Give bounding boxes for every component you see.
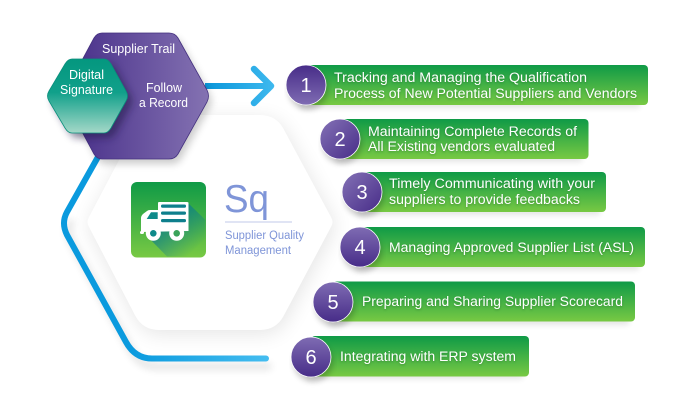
label: Digital Signature: Signature <box>60 83 113 97</box>
label: Follow a Record: Follow <box>146 81 183 95</box>
step 2 <box>320 119 588 164</box>
step 6 <box>291 336 529 382</box>
step 3: 3 <box>356 182 368 204</box>
connector: blue line around hexagon <box>64 148 271 366</box>
step 4: 4 <box>354 237 366 259</box>
step 2: All Existing vendors evaluated <box>368 139 555 154</box>
step 5 <box>313 282 635 327</box>
step 3: Timely Communicating with your <box>389 176 596 191</box>
icon: green truck tile <box>131 182 206 258</box>
step 1: Tracking and Managing the Qualification <box>334 70 587 85</box>
label: Supplier Quality Management: Supplier Quality <box>225 230 304 242</box>
step 5: 5 <box>327 292 339 314</box>
label: Digital Signature: Digital <box>69 68 104 82</box>
label: Supplier Trail: Supplier Trail <box>102 42 175 56</box>
logo: Sq Supplier Quality Management <box>224 178 304 257</box>
step 1 <box>286 65 648 110</box>
step 5: Preparing and Sharing Supplier Scorecard <box>362 294 623 309</box>
panel: teal hexagon Digital Signature <box>48 59 132 138</box>
step 6: Integrating with ERP system <box>340 349 516 364</box>
step 4: Managing Approved Supplier List (ASL) <box>389 240 634 255</box>
step 4 <box>340 227 645 272</box>
step 2: Maintaining Complete Records of <box>368 124 577 139</box>
step 1: 1 <box>300 75 312 97</box>
panel: central white hexagon <box>88 115 334 334</box>
step 2: 2 <box>334 129 346 151</box>
step 3: suppliers to provide feedbacks <box>389 192 580 207</box>
logo: Sq Supplier Quality Management: Sq <box>224 178 269 221</box>
label: Supplier Quality Management: Management <box>225 245 292 257</box>
step 6: 6 <box>305 347 317 369</box>
panel: purple hexagon Supplier Trail <box>64 33 212 164</box>
label: Follow a Record: a Record <box>139 96 188 110</box>
step 1: Process of New Potential Suppliers and Vendors <box>334 86 637 101</box>
arrow: to first step <box>205 69 271 103</box>
step 3 <box>342 172 606 217</box>
